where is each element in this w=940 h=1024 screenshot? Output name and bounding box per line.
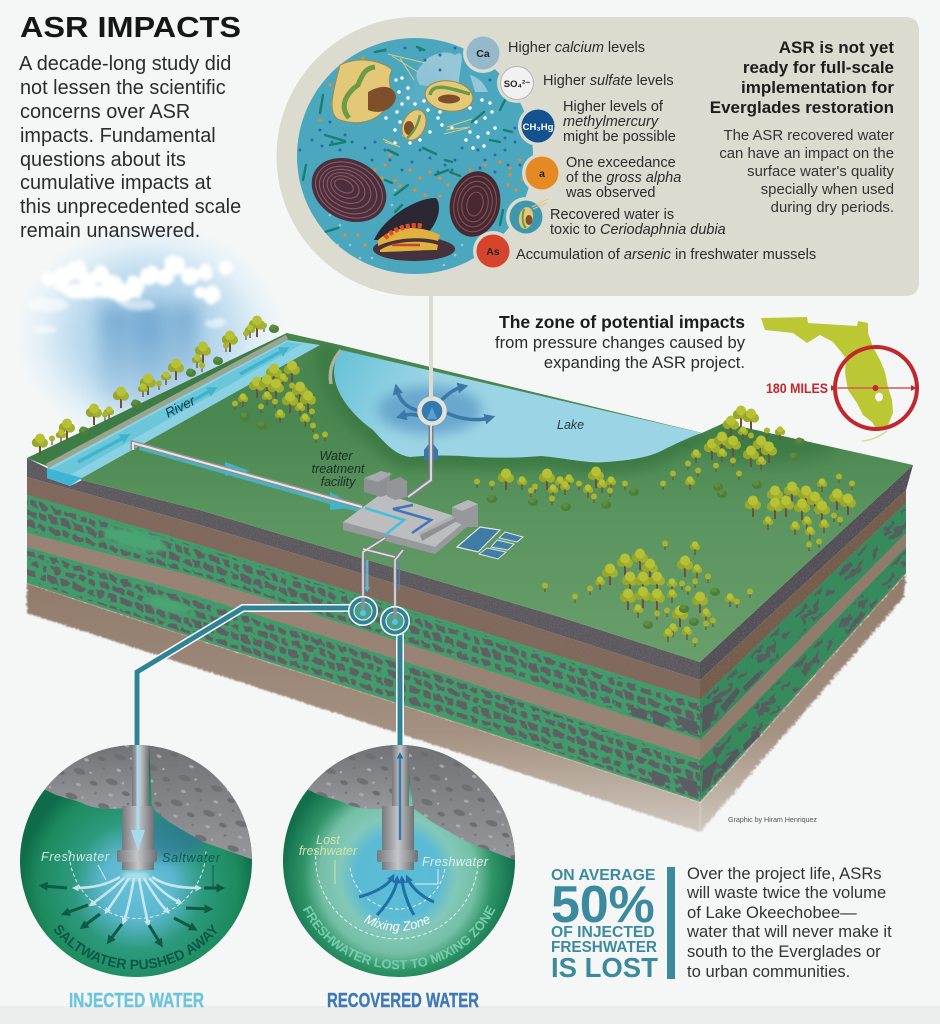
stat: 50 percent lost: ON AVERAGE [551,867,655,884]
circle diagram: injected water [20,745,252,977]
trees: middle cluster [474,466,639,511]
label: methylmercury: might be possible [563,129,676,145]
badge: calcium [463,33,503,73]
mussel: left clam [301,146,397,234]
label: water treatment facility [312,449,365,489]
stat explanation text [686,864,892,981]
badge: sulfate: SO₄²⁻ [504,79,530,90]
label: methylmercury: methylmercury [563,114,659,130]
pipes from facility down to wells [363,538,403,622]
label: gross alpha: was observed [565,185,655,201]
fan arrows: freshwater [76,877,198,923]
stat: 50 percent lost: IS LOST [551,952,658,983]
badge: arsenic [473,231,513,271]
panel heading: ASR is not yet [779,38,894,57]
map: Florida with 180 mile circle [761,317,917,441]
badge: arsenic: As [486,246,500,258]
label: water treatment facility: treatment [312,462,365,476]
callout line: saltwater [212,865,214,887]
label: River: River [163,393,198,421]
lake outflow arrows [397,387,489,420]
label: calcium: Higher calcium levels [508,40,645,56]
zone of impacts text: The zone of potential impacts [499,312,745,332]
trees: field cluster near the lake [232,360,328,443]
panel heading: implementation for [741,78,894,97]
recovery arrows [359,878,434,915]
title: ASR IMPACTS [20,12,241,44]
label: saltwater: Saltwater [162,851,221,865]
plankton antennae [383,54,472,147]
panel body text: can have an impact on the [719,146,894,162]
intro text: concerns over ASR [20,101,190,123]
label: ceriodaphnia: Recovered water is [550,207,674,223]
plankton: large daphnia [332,60,396,123]
heading: recovered water: RECOVERED WATER [327,990,479,1012]
badge: ceriodaphnia [506,197,548,237]
block: front left face soil and aquifer layers [20,458,710,832]
label: methylmercury: Higher levels of [563,99,664,115]
trees along the river bank [32,316,279,455]
callout line: freshwater [415,869,438,884]
river [47,337,320,486]
mussel: right clam [444,167,506,241]
dashed boundaries: mixing zone [316,850,478,939]
intro text: this unprecedented scale [20,196,241,218]
label: gross alpha: of the gross alpha [566,170,681,186]
water sample circle [297,33,816,274]
saltwater arrows [44,886,220,943]
label: Lake: Lake [557,418,584,432]
bottom shaded strip [0,1006,940,1024]
stat: 50 percent lost: OF INJECTED [551,924,655,941]
trees: right cluster [745,474,856,551]
curved label: mixing zone: Mixing Zone [364,914,430,934]
pipe from river to treatment facility [133,443,362,510]
panel heading [710,38,894,117]
intro text: remain unanswered. [20,220,200,242]
panel body text: surface water's quality [747,164,895,180]
label: sulfate: Higher sulfate levels [543,73,674,89]
badge: calcium: Ca [476,48,490,60]
zone of impacts text: expanding the ASR project. [544,353,745,372]
mussel: open mussel [373,198,455,261]
label: lost freshwater: freshwater [299,844,358,858]
map: Florida with 180 mile circle: 180 MILES [766,380,828,396]
callout line: freshwater [98,865,106,880]
label: freshwater: Freshwater [422,855,489,869]
curved label: freshwater lost to mixing zone: FRESHWATER LOST TO MIXING ZONE [302,906,496,970]
label: ceriodaphnia: toxic to Ceriodaphnia dubia [550,222,726,238]
zone of impacts text [495,312,746,372]
label: water treatment facility: Water [319,449,353,463]
stat explanation text: will waste twice the volume [686,883,886,902]
stat: 50 percent lost [551,867,658,983]
connector: injected water callout [137,608,350,745]
intro text: not lessen the scientific [20,77,226,99]
intro text: questions about its [20,149,186,171]
stat explanation text: Over the project life, ASRs [687,864,882,883]
heading: injected water: INJECTED WATER [69,990,204,1012]
stat explanation text: south to the Everglades or [687,942,881,961]
plankton: small daphnia [397,106,431,144]
panel body text: during dry periods. [771,200,894,216]
lake injection marker [420,398,444,424]
dashed boundary: injected [69,850,206,918]
panel body text: The ASR recovered water [724,128,894,144]
badge: methylmercury [518,106,558,146]
stat explanation text: water that will never make it [686,922,892,941]
graphic credit: Graphic by Hiram Henriquez [728,815,817,824]
badge: sulfate [497,63,537,103]
panel body text: specially when used [761,182,894,198]
panel connector line [429,295,433,398]
label: lost freshwater: Lost [316,833,340,847]
pipe from facility to lake [408,424,438,497]
stat: 50 percent lost: FRESHWATER [551,939,657,956]
sky with clouds and rain [15,223,285,447]
callout line: lost freshwater [334,860,336,884]
badge: gross alpha: a [539,168,545,180]
badge: methylmercury: CH₃Hg [523,122,554,133]
label: arsenic: Accumulation of arsenic in freshwater mussels [516,247,816,263]
label: gross alpha [565,155,681,201]
panel heading: Everglades restoration [710,98,894,117]
well marker: recovery [381,607,409,635]
connector: recovered water callout [396,634,404,745]
label: methylmercury [563,99,676,145]
stat explanation text: of Lake Okeechobee— [687,903,857,922]
water treatment facility [343,471,523,559]
intro text: A decade-long study did [19,53,231,75]
zone of impacts text: from pressure changes caused by [495,333,746,352]
label: water treatment facility: facility [321,475,356,489]
trees: front cluster [542,540,753,647]
intro text: impacts. Fundamental [20,125,216,147]
curved label: saltwater pushed away: SALTWATER PUSHED AWAY [54,924,217,970]
circle diagram: recovered water [283,745,515,977]
trees: back right hill clusters [660,406,805,498]
intro text [19,53,241,242]
label: gross alpha: One exceedance [566,155,676,171]
ground surface [27,333,913,662]
badge: gross alpha [522,153,562,193]
label: ceriodaphnia [550,207,726,238]
panel heading: ready for full-scale [743,58,894,77]
plankton: medium daphnia [423,78,475,114]
label: lost freshwater [299,833,358,858]
lake [330,350,702,462]
stat explanation text: to urban communities. [687,962,850,981]
well marker: injection [349,597,377,625]
panel body text [719,128,895,216]
hills around the lake [27,333,840,470]
intro text: cumulative impacts at [20,172,212,194]
stat: 50 percent lost: 50% [551,876,654,934]
label: freshwater: Freshwater [41,850,110,864]
block: front right face soil and aquifer layers [695,465,913,832]
stat divider bar [667,867,675,979]
